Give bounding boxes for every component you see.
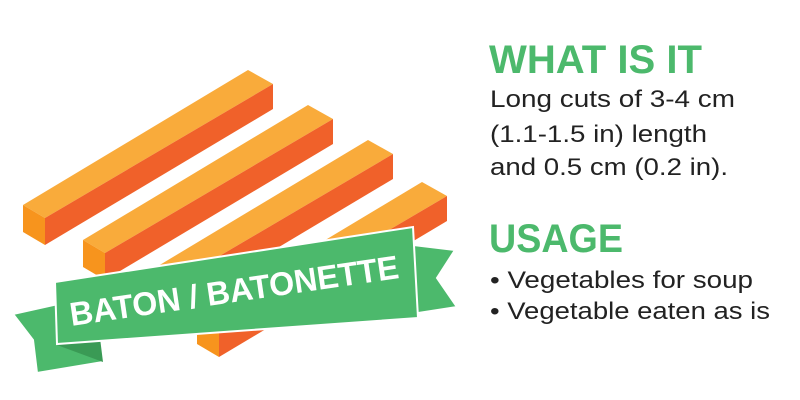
right ribbon tail <box>372 240 457 320</box>
stick 3 <box>143 140 393 315</box>
heading: usage: USAGE <box>489 217 623 261</box>
stick 1 <box>23 70 273 245</box>
heading: what is it: WHAT IS IT <box>489 38 702 82</box>
description text: (1.1-1.5 in) length <box>490 121 707 148</box>
stick 2 <box>83 105 333 280</box>
usage list: • Vegetable eaten as is <box>490 298 770 325</box>
description text: Long cuts of 3-4 cm <box>490 86 735 113</box>
usage list: • Vegetables for soup <box>490 267 753 294</box>
stick 4 <box>197 182 447 357</box>
main band <box>55 227 418 344</box>
ribbon banner <box>13 227 457 373</box>
banner text: BATON / BATONETTE <box>67 248 401 333</box>
left ribbon tail <box>13 304 103 373</box>
usage list <box>490 267 770 325</box>
illustration: baton sticks <box>23 70 447 357</box>
description text: and 0.5 cm (0.2 in). <box>490 154 728 181</box>
description text <box>490 86 735 181</box>
